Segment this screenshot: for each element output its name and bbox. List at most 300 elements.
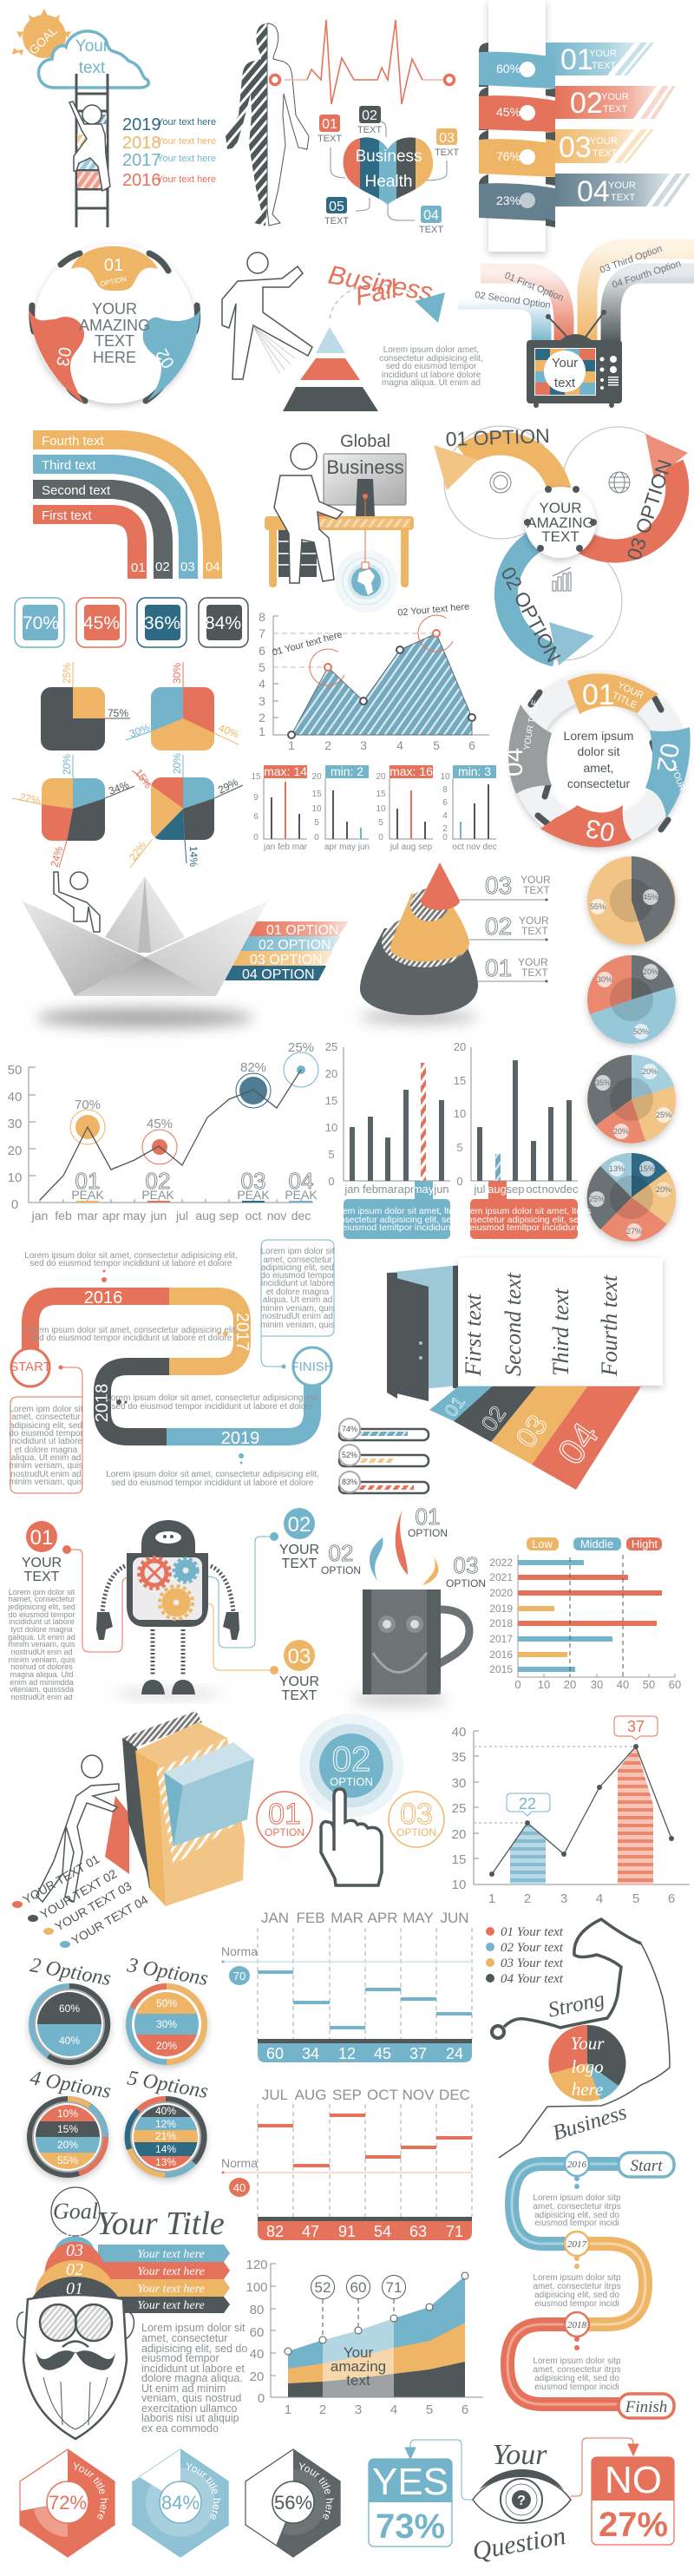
icon: flying triangle xyxy=(415,292,445,323)
axis labels: 40 xyxy=(8,1090,22,1104)
center text: YOUR xyxy=(92,300,137,318)
option 03 button xyxy=(389,1792,444,1847)
text block xyxy=(141,2322,247,2435)
square pie labels: 25% xyxy=(61,663,73,684)
panel: ribbon list xyxy=(479,0,691,252)
title words: Business xyxy=(550,2101,630,2146)
mug labels: 03 xyxy=(454,1552,478,1578)
callout: red box: Lorem ipm dolor sit xyxy=(9,1405,83,1414)
pie value labels: 30% xyxy=(597,975,612,984)
peak labels: 04 xyxy=(289,1168,313,1194)
hexagon 72%: Your title here xyxy=(74,2462,108,2520)
text block: incididunt ut labore dolore xyxy=(382,370,481,380)
callout: consectetur adipisicing elit, sedlk xyxy=(458,1215,591,1225)
points xyxy=(489,1744,674,1877)
icon: mug xyxy=(351,1590,469,1706)
titles: 3 Options xyxy=(125,1954,210,1990)
text block: consectetur adipisicing elit, xyxy=(379,354,483,364)
icons: clock, globe, bars xyxy=(490,472,630,591)
option bars: 01 OPTION xyxy=(266,923,339,938)
robot text column: magna aliqua. Utd xyxy=(10,1670,74,1679)
icon: tv xyxy=(527,310,622,408)
callout xyxy=(330,1181,463,1239)
hat layers: 01 xyxy=(66,2279,83,2298)
pie value labels xyxy=(589,889,671,1239)
segment: 01 xyxy=(567,673,658,714)
hexagon 84%: Your title here xyxy=(187,2462,221,2520)
label: 01: TEXT xyxy=(24,1570,60,1584)
panel: three tab circle xyxy=(29,244,200,403)
text block: eiusmod tempor xyxy=(141,2352,219,2364)
text block: laboris nisi ut aliquip xyxy=(141,2412,239,2424)
rotated legend: YOUR TEXT 04 xyxy=(69,1892,150,1948)
robot text column: noshud ot dolores xyxy=(10,1662,73,1671)
title words: Strong xyxy=(546,1988,606,2022)
progress meters xyxy=(339,1419,429,1493)
text block: incididunt ut labore et xyxy=(141,2363,245,2375)
panel: round pies xyxy=(587,856,676,1242)
panel: small bar charts xyxy=(251,764,497,852)
center text xyxy=(79,300,150,366)
titles xyxy=(29,1954,210,2103)
text block: amet, consectetur xyxy=(141,2332,227,2344)
legend: 04 Your text xyxy=(501,1972,564,1986)
progress meters: 52% xyxy=(342,1451,357,1459)
badge: 36%: 36% xyxy=(144,613,180,633)
panel: tv options xyxy=(458,244,694,408)
chart labels: 4 xyxy=(442,811,448,821)
hull xyxy=(22,901,268,996)
numbered tags: TEXT xyxy=(357,125,382,135)
center text: Lorem ipsum xyxy=(564,729,633,743)
norma line xyxy=(221,1944,472,1985)
robot text column: nostrudUt enin ad xyxy=(10,1693,73,1701)
totals bar xyxy=(258,2039,472,2062)
banners: YOUR xyxy=(608,180,636,191)
axis labels: 2020 xyxy=(489,1587,513,1599)
totals bar: 24 xyxy=(446,2045,463,2062)
option bars xyxy=(225,921,349,982)
ribbon tabs: 45% xyxy=(496,105,520,119)
nodes xyxy=(565,2152,589,2350)
bubbles: 60 xyxy=(350,2279,366,2296)
pie value labels: 20% xyxy=(656,1185,671,1194)
center circle: AMAZING xyxy=(527,515,594,531)
pie: 5 options: 13% xyxy=(155,2156,176,2168)
text: top note xyxy=(24,1251,238,1268)
peak labels: PEAK xyxy=(71,1188,104,1202)
panel: bar chart second half xyxy=(454,1040,591,1239)
numbered tags: TEXT xyxy=(318,134,342,144)
axis labels: 2 xyxy=(319,2402,326,2417)
label: 03 xyxy=(270,1640,319,1703)
chart labels: 15 xyxy=(311,790,322,799)
chart headers: max: 16 xyxy=(390,764,433,778)
callout: red box: amet, consectetur xyxy=(11,1413,81,1422)
axis labels: apr xyxy=(398,1183,415,1196)
ECG line xyxy=(271,20,455,104)
points xyxy=(285,2272,468,2355)
pie 35/20/25/20 xyxy=(587,1055,676,1144)
axis labels: 20 xyxy=(250,2370,264,2384)
axis labels: 1 xyxy=(285,2402,291,2417)
hexagon 72%: 72% xyxy=(49,2492,87,2514)
start cap xyxy=(619,2153,674,2177)
text blocks xyxy=(533,2193,621,2392)
numbered tags: 02 xyxy=(362,108,377,123)
month headers xyxy=(262,2087,470,2103)
callout: blue box: do eiusmod tempor xyxy=(260,1271,335,1281)
titles: 2 Options xyxy=(29,1954,113,1990)
text block: sed do eiusmod tempor xyxy=(386,362,477,371)
robot text column: hamet, consectetur xyxy=(9,1595,75,1603)
arrow: orange xyxy=(434,424,560,490)
axis labels: 25 xyxy=(325,1040,337,1053)
bars xyxy=(33,440,213,579)
axis labels: 100 xyxy=(246,2280,268,2295)
rotated legend xyxy=(12,1852,150,1948)
bar labels xyxy=(42,434,220,575)
badge: 70% xyxy=(15,598,64,647)
square pie labels: 22% xyxy=(18,790,42,807)
icon: sun: GOAL xyxy=(26,23,60,57)
heart chart xyxy=(344,137,434,205)
robot text column: enim ad minimdda xyxy=(10,1678,74,1687)
callout xyxy=(457,1181,591,1239)
bubbles: 22 xyxy=(519,1795,536,1812)
totals bar xyxy=(258,2217,472,2240)
pie 13/15/20/27/25 xyxy=(587,1153,676,1242)
text: inner note 2018 xyxy=(106,1393,319,1412)
fan segments xyxy=(429,1386,641,1490)
axis labels: 30 xyxy=(452,1776,466,1791)
fan numbers xyxy=(442,1393,606,1472)
cone: orange xyxy=(390,894,469,961)
label: 02: YOUR xyxy=(279,1543,319,1557)
icon: globe xyxy=(335,550,397,613)
axes and bars xyxy=(344,1047,450,1181)
axis labels xyxy=(259,610,475,752)
icon: seated person xyxy=(274,443,343,583)
label: 02: TEXT xyxy=(282,1557,318,1571)
axis labels: 60 xyxy=(669,1678,681,1691)
icon: sun xyxy=(12,9,71,102)
panel: mug xyxy=(321,1504,486,1706)
totals bar: 45 xyxy=(374,2045,391,2062)
axes xyxy=(29,1067,313,1203)
finish node: FINISH xyxy=(291,1360,334,1374)
month values xyxy=(258,1970,472,2029)
pie: 5 options: 14% xyxy=(155,2143,176,2155)
pie: 4 options: 20% xyxy=(57,2139,78,2151)
text: inner note 2018: sed do eiusmod tempor incididunt ut labore et dolore xyxy=(112,1402,314,1412)
axis labels: 6 xyxy=(462,2402,468,2417)
icon: pushing person xyxy=(36,1755,119,1902)
banners: 01 xyxy=(560,43,593,76)
title: Your Title xyxy=(96,2206,225,2242)
chart headers: min: 2 xyxy=(331,764,363,778)
norma line: 70 xyxy=(233,1970,246,1983)
panel: pushing books xyxy=(12,1711,254,1948)
panel: hexagon gauges xyxy=(19,2448,341,2558)
chart axes xyxy=(264,778,496,839)
totals bar: 47 xyxy=(302,2223,319,2240)
areas xyxy=(288,2276,465,2397)
icon: monitor: Global xyxy=(340,432,390,451)
icon: tv: text xyxy=(554,376,576,390)
pie: 4 options: 10% xyxy=(57,2107,78,2120)
norma line: Norma xyxy=(221,1944,258,1958)
chart labels: 15 xyxy=(376,790,386,799)
axis labels: 2 xyxy=(524,1891,531,1906)
bar labels: 03 xyxy=(180,560,195,574)
vertical texts xyxy=(461,1272,622,1377)
cone: dark xyxy=(359,928,478,1024)
cone labels: YOUR xyxy=(520,874,551,886)
chart labels: 6 xyxy=(442,798,448,808)
axis labels: 10 xyxy=(538,1678,550,1691)
pie value labels: 25% xyxy=(656,1111,671,1119)
chart labels: oct nov dec xyxy=(452,842,497,852)
square pie labels: 30% xyxy=(128,721,152,740)
axes xyxy=(271,2264,483,2397)
hat layers: 04 xyxy=(66,2222,83,2241)
chart labels: 0 xyxy=(253,833,259,842)
panel: paper boat xyxy=(22,872,349,1028)
finish cap xyxy=(619,2394,674,2418)
banners xyxy=(546,43,691,208)
peak labels: 01 xyxy=(75,1168,100,1194)
robot text column: jedipisicing elit, sed xyxy=(7,1603,75,1611)
axis labels: 30 xyxy=(591,1678,603,1691)
segment: 04 xyxy=(500,698,552,794)
segment: 03 xyxy=(540,805,632,847)
axis labels: 40 xyxy=(617,1678,629,1691)
chart labels: 20 xyxy=(376,772,386,782)
axis labels: 6 xyxy=(259,644,265,658)
ladder xyxy=(76,74,108,227)
year list: 2016 xyxy=(122,171,161,190)
callout: red box: incididunt ut labore xyxy=(10,1437,82,1446)
legend: 03 Your text xyxy=(501,1957,564,1970)
pie: 4 options: 55% xyxy=(57,2154,78,2166)
ribbons: Your text here xyxy=(137,2248,205,2261)
axis labels: 2 xyxy=(324,738,331,752)
panel: business fail xyxy=(222,252,483,411)
chart headers: max: 14 xyxy=(264,764,307,778)
chart labels: jan feb mar xyxy=(263,842,308,852)
hatched ladder rungs xyxy=(77,115,107,188)
axis labels: 2 xyxy=(259,711,265,724)
cone labels: TEXT xyxy=(521,967,548,979)
badge: 45%: 45% xyxy=(83,613,120,633)
person xyxy=(54,872,100,932)
axis labels: 0 xyxy=(514,1678,521,1691)
bars xyxy=(272,782,488,839)
hatch shadow xyxy=(410,888,448,921)
axis labels: 1 xyxy=(288,738,295,752)
axis labels: 50 xyxy=(643,1678,655,1691)
pie value labels: 20% xyxy=(642,1067,658,1076)
month headers: MAY xyxy=(403,1910,434,1926)
bar labels: Second text xyxy=(42,483,111,498)
pie: 4 options xyxy=(27,2096,108,2178)
segment: 04: YOUR TITLE xyxy=(522,698,540,751)
pie value labels: 15% xyxy=(639,1164,655,1173)
arc labels: 03 Third Option xyxy=(599,244,664,276)
legend pills xyxy=(527,1537,662,1550)
axis labels: 4 xyxy=(596,1891,603,1906)
chart labels: 10 xyxy=(311,804,322,814)
text block: adipisicing elit, sed do xyxy=(141,2343,247,2355)
pie value labels: 25% xyxy=(589,1195,605,1203)
trend line xyxy=(40,1070,301,1200)
callout: blue box: minim veniam, quis xyxy=(260,1304,335,1314)
peak labels: 03 xyxy=(241,1168,265,1194)
square pie 4 xyxy=(151,777,214,840)
year list: Your text here xyxy=(157,154,216,164)
vertical texts: Fourth text xyxy=(597,1275,622,1377)
banners: 02 xyxy=(570,87,603,120)
axis labels: 10 xyxy=(452,1878,466,1892)
center text: text xyxy=(346,2372,370,2389)
panel: calendar chart second half xyxy=(221,2087,472,2240)
arrow: blue: 02 OPTION xyxy=(496,563,566,665)
goal bubble xyxy=(51,2187,100,2236)
data points xyxy=(288,608,475,738)
square pie labels: 75% xyxy=(108,707,128,719)
robot text column: galiqua. Ut enim ad xyxy=(8,1633,75,1642)
center text: HERE xyxy=(93,349,136,366)
panel: rainbow bars xyxy=(33,434,220,579)
axis labels: jul xyxy=(175,1209,188,1222)
icon: arm outline xyxy=(492,1919,670,2158)
road year labels xyxy=(84,1288,259,1448)
banners: YOUR xyxy=(589,49,617,59)
icon: cloud xyxy=(38,31,148,88)
callout: consectetur adipisicing elit, sedlk xyxy=(331,1215,463,1225)
text: top note: sed do eiusmod tempor incididunt ut labore et dolore xyxy=(30,1259,232,1268)
panel: striped line chart xyxy=(452,1716,690,1906)
connectors xyxy=(67,1537,274,1670)
axis labels: nov xyxy=(267,1209,286,1222)
text blocks: amet, consectetur itrps xyxy=(533,2202,621,2212)
tab: 01: 01 xyxy=(104,256,123,275)
axis labels: 10 xyxy=(325,1121,337,1134)
chart labels: 15 xyxy=(251,772,261,782)
axis labels: 0 xyxy=(328,1175,335,1188)
icon: monitor xyxy=(324,432,406,569)
chart labels: 6 xyxy=(253,812,259,822)
text block xyxy=(379,345,483,388)
axis labels: 4 xyxy=(259,677,265,691)
month headers: JAN xyxy=(261,1910,289,1926)
ribbons: Your text here xyxy=(137,2299,205,2312)
axis labels: 2018 xyxy=(489,1617,513,1629)
ribbon tabs: 23% xyxy=(496,193,520,207)
panel: arrow cycle xyxy=(434,424,688,665)
grey slab xyxy=(122,1711,202,1894)
axis labels: may xyxy=(123,1209,146,1222)
center text: consectetur xyxy=(567,777,631,790)
panel: serpentine timeline xyxy=(507,2152,674,2418)
panel: robot xyxy=(7,1508,319,1703)
tab: 03 xyxy=(29,310,84,403)
progress meters: 83% xyxy=(342,1478,357,1486)
tab: 01 xyxy=(71,246,158,291)
axis labels: feb xyxy=(55,1209,72,1222)
titles: 4 Options xyxy=(29,2067,113,2103)
red block xyxy=(105,1796,129,1874)
option 02 button: OPTION xyxy=(330,1775,373,1788)
peak circles xyxy=(70,1052,318,1164)
pie value labels: 55% xyxy=(590,902,606,911)
heart label xyxy=(355,147,422,191)
axis labels: feb xyxy=(363,1183,378,1196)
road xyxy=(30,1296,312,1437)
chart labels xyxy=(251,772,497,852)
pie value labels: 20% xyxy=(613,1127,629,1136)
totals bar: 54 xyxy=(374,2223,391,2240)
legend xyxy=(486,1925,564,1986)
panel: global business xyxy=(265,432,414,613)
segment: 01: TITLE xyxy=(611,691,638,711)
ribbons xyxy=(98,2245,230,2313)
axis labels: jan xyxy=(344,1183,360,1196)
totals bar: 63 xyxy=(409,2223,427,2240)
axis labels: 3 xyxy=(259,694,265,708)
center text xyxy=(331,2344,386,2389)
sail xyxy=(105,876,185,953)
nodes: 2016 xyxy=(567,2160,586,2170)
icon: body figure xyxy=(226,23,309,226)
background rings xyxy=(444,426,675,660)
pie 55/45 xyxy=(587,856,676,945)
square pie labels xyxy=(12,662,243,868)
bubbles xyxy=(507,1716,658,1816)
axis labels: mar xyxy=(77,1209,98,1222)
badge: 45% xyxy=(76,598,126,647)
hexagon 56% xyxy=(245,2448,341,2558)
cone labels: 01 xyxy=(485,954,512,981)
panel: numbered ring xyxy=(500,673,694,847)
fan numbers: 03 xyxy=(509,1409,553,1453)
panel: door fan xyxy=(339,1258,663,1493)
chart labels: 8 xyxy=(442,785,448,795)
axis labels: 15 xyxy=(325,1094,337,1107)
axis labels: jun xyxy=(433,1183,449,1196)
panel: yes no question xyxy=(369,2438,674,2566)
arrow: blue xyxy=(496,540,594,665)
ribbons: Your text here xyxy=(137,2283,205,2296)
axis labels: 2017 xyxy=(489,1633,513,1645)
month headers: APR xyxy=(368,1910,397,1926)
panel: business health xyxy=(226,20,459,235)
callout: red box: adipisicing elit, sed xyxy=(10,1421,82,1431)
panel: stacked cones xyxy=(359,862,551,1024)
bar labels: 04 xyxy=(206,560,220,574)
axis labels: 20 xyxy=(8,1144,22,1158)
icon: climbing person xyxy=(69,102,110,191)
square pie 1 xyxy=(41,687,105,751)
numbered tags: 01 xyxy=(322,117,337,132)
numbered tags: 04 xyxy=(423,208,439,223)
axis labels: aug xyxy=(195,1209,216,1222)
axis labels: 0 xyxy=(11,1197,18,1212)
robot text column: minim veniam, quis xyxy=(8,1640,75,1649)
axis labels: 20 xyxy=(325,1067,337,1080)
white strip xyxy=(488,0,546,252)
